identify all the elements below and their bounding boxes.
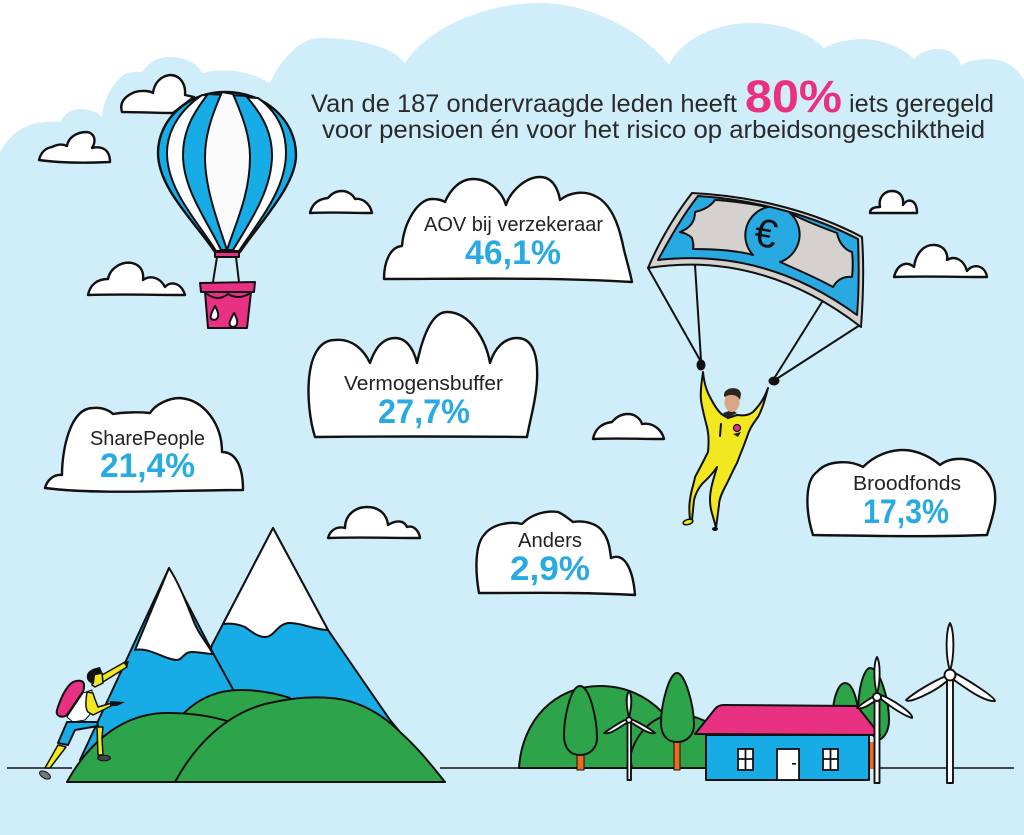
- cloud: Anders: 2,9%: [510, 550, 590, 588]
- small cloud: centre: [593, 414, 664, 439]
- green hills: [184, 690, 290, 725]
- backpack: [57, 681, 84, 717]
- head: [92, 673, 103, 687]
- hot air balloon: [158, 92, 296, 328]
- cloud: SharePeople: [45, 398, 243, 492]
- shorts: [58, 722, 98, 745]
- hands: [696, 360, 706, 370]
- title line 1 end: iets geregeld: [849, 90, 994, 118]
- small cloud: top right: [870, 191, 917, 213]
- highlight 80%: 80%: [745, 71, 842, 122]
- title line 2: voor pensioen én voor het risico op arbeidsongeschiktheid: [322, 116, 985, 144]
- legs: [45, 745, 66, 768]
- balloon basket: [200, 282, 255, 328]
- banknote parachute: [648, 193, 863, 327]
- small cloud: below balloon left: [88, 263, 185, 295]
- windows: [738, 749, 838, 770]
- cloud: Vermogensbuffer: 27,7%: [378, 393, 470, 431]
- cloud: Vermogensbuffer: Vermogensbuffer: [344, 373, 503, 395]
- shirt: [67, 690, 92, 722]
- cloud: SharePeople: 21,4%: [100, 447, 195, 485]
- village landscape: [519, 623, 995, 783]
- small cloud: behind balloon: [121, 75, 194, 113]
- cloud: SharePeople: SharePeople: [90, 428, 205, 450]
- shirt logo: [734, 424, 740, 432]
- parachute lines: [648, 265, 860, 378]
- small cloud: right: [894, 245, 987, 277]
- green hills: [519, 686, 720, 768]
- right mountain: [190, 528, 400, 732]
- small cloud: above mountains: [328, 507, 420, 538]
- climber: [38, 661, 129, 781]
- tree middle: [661, 673, 694, 770]
- tree left: [564, 686, 597, 770]
- title line 1 start: Van de 187 ondervraagde leden heeft: [311, 90, 737, 118]
- cloud: Anders: [476, 512, 635, 595]
- balloon collar: [215, 252, 239, 257]
- cloud: Broodfonds: 17,3%: [863, 493, 949, 531]
- cloud: Anders: Anders: [518, 530, 582, 552]
- hands of climber: [110, 701, 125, 706]
- cloud: Broodfonds: Broodfonds: [853, 473, 961, 495]
- trees behind house: [833, 683, 858, 708]
- ground line: [7, 767, 1014, 769]
- cloud: AOV bij verzekeraar: 46,1%: [465, 234, 561, 272]
- windmill medium: [857, 657, 912, 783]
- cloud: AOV bij verzekeraar: AOV bij verzekeraar: [424, 214, 603, 236]
- door: [777, 749, 799, 780]
- face: [724, 392, 740, 412]
- left mountain: [80, 568, 235, 760]
- cloud: Broodfonds: [807, 450, 995, 536]
- title: [311, 71, 994, 144]
- small cloud: centre top: [310, 191, 372, 213]
- mountains: [67, 528, 445, 782]
- money parachutist: [648, 193, 863, 531]
- cloud: AOV bij verzekeraar: [384, 177, 632, 282]
- balloon envelope: [158, 92, 296, 252]
- euro sign: €: [751, 210, 781, 258]
- small cloud: far left: [39, 132, 110, 163]
- parachutist body: [683, 360, 780, 531]
- neck collar: [723, 410, 737, 418]
- windmill small: [604, 691, 655, 780]
- arms: [102, 662, 127, 682]
- balloon ropes: [213, 257, 239, 282]
- shoes: [98, 755, 110, 761]
- cloud: Vermogensbuffer: [308, 312, 537, 437]
- windmill large: [906, 623, 995, 783]
- house: [695, 705, 880, 780]
